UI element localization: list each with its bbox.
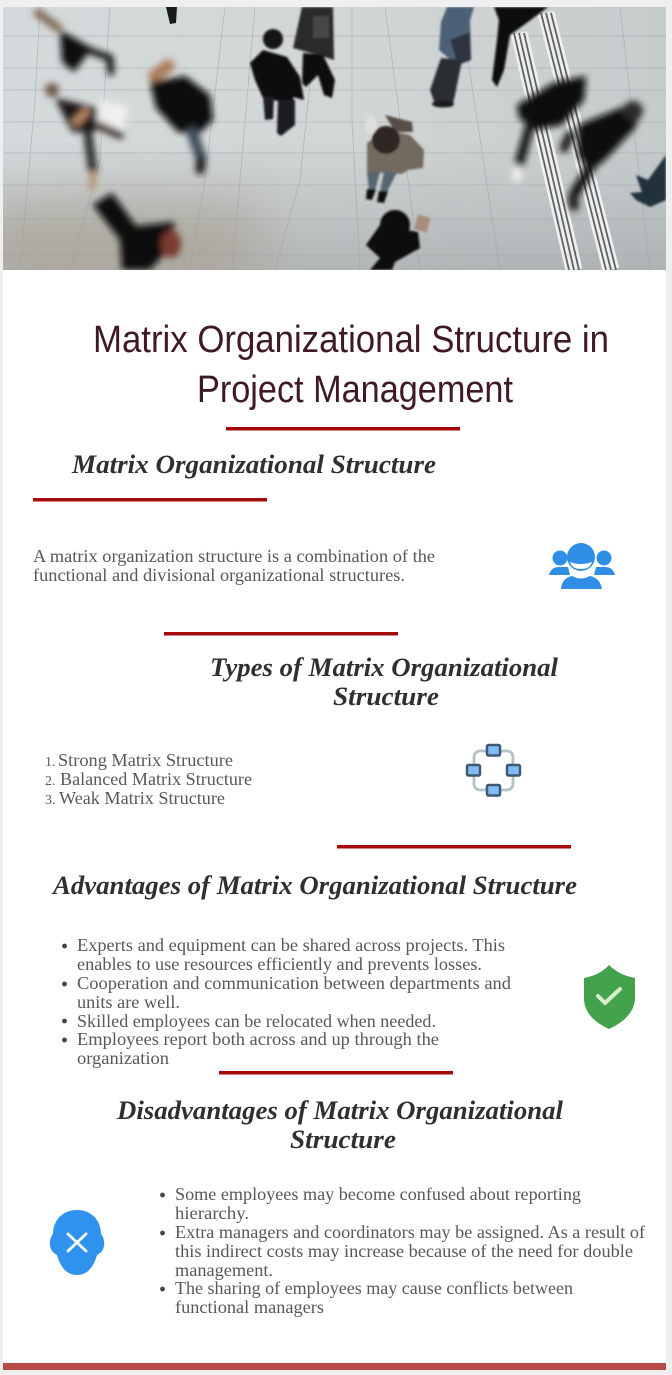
rule — [33, 498, 267, 502]
text: definition: functional and divisional organizational structures. — [33, 565, 405, 585]
list: disadvantages: functional managers — [175, 1297, 324, 1317]
list: disadvantages: The sharing of employees may cause conflicts between — [175, 1278, 573, 1298]
list: types: 3. — [45, 793, 56, 808]
person at bottom in black — [366, 210, 431, 270]
list: disadvantages: Some employees may become confused about reporting — [175, 1184, 581, 1204]
heading: disadvantages: Structure — [290, 1125, 396, 1154]
list: advantages: units are well. — [77, 992, 180, 1012]
woman with backpack — [365, 115, 424, 203]
list: advantages: Skilled employees can be relocated when needed. — [77, 1011, 436, 1031]
heading: disadvantages: Disadvantages of Matrix Organizational — [116, 1096, 564, 1125]
list: advantages: Cooperation and communication between departments and — [77, 973, 511, 993]
list: disadvantages: Extra managers and coordinators may be assigned. As a result of — [175, 1222, 645, 1242]
heading: matrix organizational structure: Matrix Organizational Structure — [71, 450, 436, 479]
list: advantages: organization — [77, 1048, 169, 1068]
walker in black at top — [492, 7, 548, 87]
icon: green shield with check — [584, 965, 635, 1029]
list: advantages — [62, 935, 511, 1068]
title rule — [226, 427, 460, 430]
hero photo: crowd from above — [0, 7, 666, 295]
section: advantages — [51, 845, 635, 1068]
man in blue jacket — [430, 7, 474, 108]
foot at top — [166, 7, 177, 24]
heading: disadvantages — [116, 1096, 564, 1154]
icon: group of people — [549, 543, 615, 589]
rule — [337, 845, 571, 848]
blurred walker top-left — [38, 13, 111, 72]
person at right edge — [630, 155, 666, 207]
heading: advantages: Advantages of Matrix Organizational Structure — [51, 871, 577, 900]
icon: head with cross — [50, 1210, 104, 1275]
title: Matrix Organizational Structure in — [93, 319, 609, 361]
rule — [164, 632, 398, 636]
heading: types of matrix organizational structure: Structure — [333, 682, 439, 711]
blurred walker centre — [150, 66, 213, 170]
rule — [219, 1071, 453, 1074]
text: definition — [33, 546, 435, 585]
section: disadvantages — [50, 1071, 645, 1317]
list: disadvantages: this indirect costs may increase because of the need for double — [175, 1241, 633, 1261]
man in checked jacket — [293, 7, 335, 98]
list: types: Strong Matrix Structure — [58, 750, 233, 770]
blurred walker right — [564, 101, 643, 206]
footer bar — [3, 1363, 666, 1370]
list: advantages: enables to use resources efficiently and prevents losses. — [77, 954, 482, 974]
list: types: 2. — [45, 774, 56, 789]
tactile stripes — [514, 13, 616, 270]
icon: connected network — [467, 745, 520, 796]
section: types — [45, 632, 559, 808]
list: types: 1. — [45, 755, 56, 770]
section: definition — [33, 450, 615, 589]
list: advantages: Employees report both across and up through the — [77, 1029, 439, 1049]
list: disadvantages: management. — [175, 1260, 273, 1280]
blurred walker left — [45, 83, 128, 187]
list: advantages: Experts and equipment can be shared across projects. This — [77, 935, 505, 955]
list: types: Balanced Matrix Structure — [60, 769, 252, 789]
list: types: Weak Matrix Structure — [59, 788, 225, 808]
title — [93, 319, 609, 411]
text: definition: A matrix organization structure is a combination of the — [33, 546, 435, 566]
list: disadvantages: hierarchy. — [175, 1203, 249, 1223]
blurred walker bottom-left — [93, 193, 181, 270]
list: disadvantages — [160, 1184, 645, 1317]
heading: types of matrix organizational structure: Types of Matrix Organizational — [210, 653, 559, 682]
list: types — [45, 750, 252, 808]
blurred walker on stripes — [517, 76, 586, 178]
title: Project Management — [197, 369, 513, 411]
standing man in black — [250, 29, 304, 136]
heading: types of matrix organizational structure — [210, 653, 559, 711]
